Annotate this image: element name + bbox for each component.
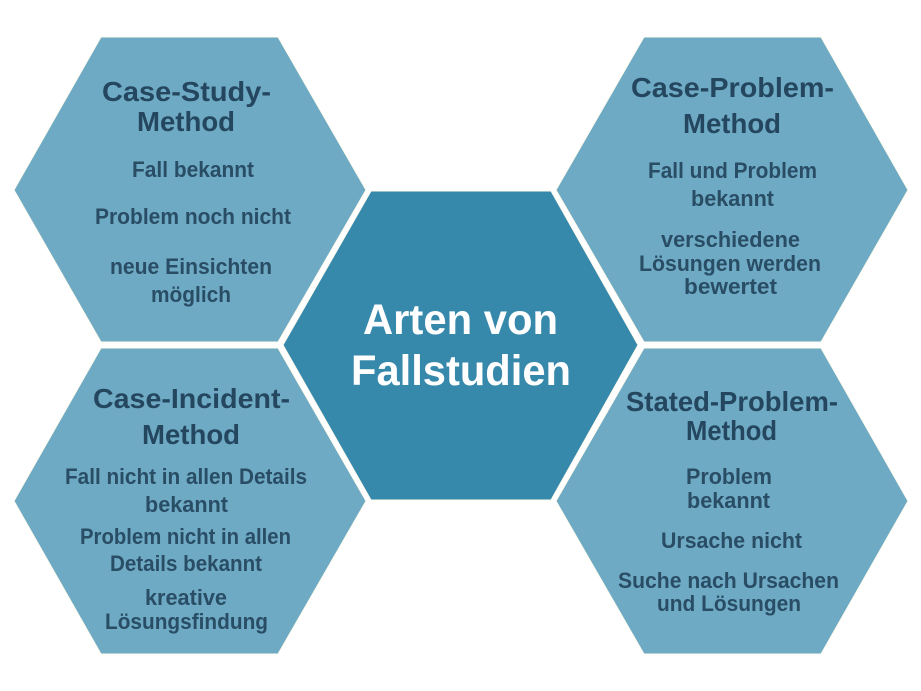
heading: Stated-Problem-Method xyxy=(626,386,838,446)
heading: Stated-Problem-Method: Method xyxy=(686,415,777,446)
text: neue Einsichten möglich: möglich xyxy=(151,282,231,307)
text: Fall nicht in allen Details bekannt: bekannt xyxy=(145,492,228,517)
heading: Case-Study-Method xyxy=(102,76,271,137)
panel: Case-Incident-Method xyxy=(14,348,366,654)
text: kreative Lösungsfindung xyxy=(105,585,268,634)
text: neue Einsichten möglich xyxy=(110,254,272,307)
title: Arten von Fallstudien: Fallstudien xyxy=(351,348,571,395)
heading: Case-Study-Method: Case-Study- xyxy=(102,76,271,107)
text: verschiedene Lösungen werden bewertet xyxy=(639,227,821,299)
text: Fall und Problem bekannt xyxy=(648,158,817,211)
text: Problem nicht in allen Details bekannt: Problem nicht in allen xyxy=(80,524,291,549)
text: verschiedene Lösungen werden bewertet: Lösungen werden xyxy=(639,251,821,276)
text: kreative Lösungsfindung: kreative xyxy=(145,585,227,610)
text: Suche nach Ursachen und Lösungen xyxy=(618,568,839,616)
heading: Case-Incident-Method xyxy=(93,383,290,450)
text: Fall bekannt: Fall bekannt xyxy=(132,157,254,182)
text: Suche nach Ursachen und Lösungen: Suche nach Ursachen xyxy=(618,568,839,593)
heading: Case-Problem-Method xyxy=(631,72,834,139)
heading: Case-Incident-Method: Case-Incident- xyxy=(93,383,290,414)
text: Suche nach Ursachen und Lösungen: und Lösungen xyxy=(657,591,801,616)
panel: Case-Problem-Method xyxy=(556,37,908,342)
heading: Stated-Problem-Method: Stated-Problem- xyxy=(626,386,838,417)
text: Problem noch nicht: Problem noch nicht xyxy=(95,204,291,229)
panel: center hexagon xyxy=(283,191,638,500)
heading: Case-Problem-Method: Method xyxy=(683,108,781,139)
text: Fall und Problem bekannt: bekannt xyxy=(691,186,774,211)
text: Fall nicht in allen Details bekannt: Fall nicht in allen Details xyxy=(65,464,307,489)
panel: Stated-Problem-Method xyxy=(556,348,908,654)
text: Ursache nicht: Ursache nicht xyxy=(661,528,802,553)
text: Fall und Problem bekannt: Fall und Problem xyxy=(648,158,817,183)
text: Problem bekannt xyxy=(686,464,772,513)
heading: Case-Problem-Method: Case-Problem- xyxy=(631,72,834,103)
panel: Case-Study-Method xyxy=(14,37,366,342)
text: Problem bekannt: Problem xyxy=(686,464,772,489)
text: Fall nicht in allen Details bekannt xyxy=(65,464,307,517)
heading: Case-Study-Method: Method xyxy=(137,106,235,137)
text: verschiedene Lösungen werden bewertet: bewertet xyxy=(684,274,778,299)
text: Problem nicht in allen Details bekannt: Details bekannt xyxy=(110,551,262,576)
text: kreative Lösungsfindung: Lösungsfindung xyxy=(105,609,268,634)
title: Arten von Fallstudien: Arten von xyxy=(363,297,558,344)
text: neue Einsichten möglich: neue Einsichten xyxy=(110,254,272,279)
text: Problem bekannt: bekannt xyxy=(687,488,770,513)
heading: Case-Incident-Method: Method xyxy=(142,419,240,450)
text: verschiedene Lösungen werden bewertet: verschiedene xyxy=(661,227,800,252)
title: Arten von Fallstudien xyxy=(351,297,571,395)
text: Problem nicht in allen Details bekannt xyxy=(80,524,291,576)
